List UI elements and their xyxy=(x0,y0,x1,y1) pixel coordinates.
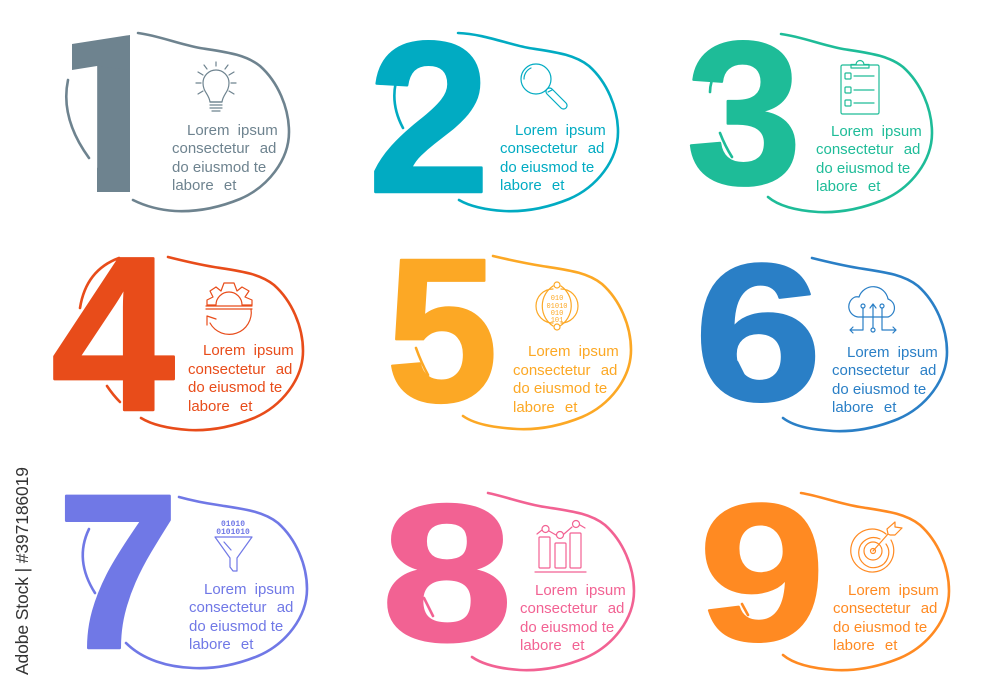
text block: Lorem ipsum xyxy=(528,343,619,360)
icon: light bulb xyxy=(196,62,236,111)
text block xyxy=(833,582,939,654)
text block: labore et xyxy=(189,636,254,653)
accent arc xyxy=(66,80,89,158)
text block: consectetur ad xyxy=(832,362,936,379)
text block: do eiusmod te xyxy=(172,159,266,176)
text block: consectetur ad xyxy=(188,361,292,378)
stock credit: Adobe Stock | #397186019 xyxy=(12,467,32,675)
accent arc xyxy=(416,348,428,375)
text block: do eiusmod te xyxy=(520,619,614,636)
text block: do eiusmod te xyxy=(833,619,927,636)
panel: step 2 xyxy=(368,0,618,239)
text block: labore et xyxy=(520,637,585,654)
accent stroke xyxy=(737,362,745,378)
text block xyxy=(832,344,938,416)
text block xyxy=(816,123,922,195)
outline curve xyxy=(768,34,932,212)
text block xyxy=(189,581,295,653)
number 1 xyxy=(72,35,130,192)
outline curve xyxy=(783,493,949,670)
text block xyxy=(500,122,606,194)
text block: consectetur ad xyxy=(833,600,937,617)
icon: binary funnel xyxy=(215,520,252,571)
icon: binary funnel: 01010 xyxy=(221,520,245,529)
text block: labore et xyxy=(513,399,578,416)
icon: clipboard xyxy=(841,60,879,114)
panel: step 8 xyxy=(381,464,634,683)
number 9: 9 xyxy=(698,463,826,682)
text block: Lorem ipsum xyxy=(848,582,939,599)
panel: step 5 xyxy=(386,216,631,445)
panel: step 3 xyxy=(686,0,932,227)
number 7: 7 xyxy=(57,448,179,695)
text block: labore et xyxy=(833,637,898,654)
icon: bar chart xyxy=(535,520,586,572)
text block: consectetur ad xyxy=(189,599,293,616)
text block: Lorem ipsum xyxy=(187,122,278,139)
number 6: 6 xyxy=(694,224,822,442)
text block xyxy=(520,582,626,654)
outline curve xyxy=(126,497,307,668)
panel: step 1 xyxy=(65,32,290,212)
outline curve xyxy=(133,33,289,211)
panel: step 6 xyxy=(694,224,947,442)
text block: do eiusmod te xyxy=(513,380,607,397)
outline curve xyxy=(783,258,947,431)
text block: labore et xyxy=(832,399,897,416)
text block: consectetur ad xyxy=(520,600,624,617)
icon: binary circle xyxy=(536,282,578,330)
number 2: 2 xyxy=(368,0,490,239)
accent arc xyxy=(394,72,403,128)
text block: Lorem ipsum xyxy=(831,123,922,140)
outline curve xyxy=(472,493,634,670)
outline curve xyxy=(458,33,618,211)
text block: do eiusmod te xyxy=(189,618,283,635)
number 4: 4 xyxy=(51,210,175,457)
text block: Lorem ipsum xyxy=(515,122,606,139)
text block: Lorem ipsum xyxy=(535,582,626,599)
number 8: 8 xyxy=(381,464,513,683)
text block xyxy=(188,342,294,415)
text block xyxy=(513,343,619,416)
text block: consectetur ad xyxy=(816,141,920,158)
panel: step 9 xyxy=(698,463,949,682)
text block xyxy=(172,122,278,194)
accent arc xyxy=(742,604,748,615)
panel: step 7 xyxy=(57,448,307,695)
text block: do eiusmod te xyxy=(188,379,282,396)
icon: binary funnel: 0101010 xyxy=(216,528,250,537)
text block: Lorem ipsum xyxy=(203,342,294,359)
accent arc xyxy=(424,598,433,616)
icon: binary circle: 01010 xyxy=(546,303,568,311)
text block: consectetur ad xyxy=(500,140,604,157)
text block: labore et xyxy=(188,398,253,415)
number 3: 3 xyxy=(686,0,802,227)
icon: target with arrow xyxy=(851,522,902,572)
accent arcs xyxy=(80,258,120,402)
icon: binary circle: 010 xyxy=(551,310,563,318)
text block: Lorem ipsum xyxy=(204,581,295,598)
text block: do eiusmod te xyxy=(816,160,910,177)
text block: labore et xyxy=(816,178,881,195)
text block: labore et xyxy=(500,177,565,194)
text block: consectetur ad xyxy=(513,362,617,379)
accent arc xyxy=(83,529,95,593)
accent arcs xyxy=(710,71,732,157)
outline curve xyxy=(463,256,631,429)
outline curve xyxy=(141,257,303,430)
icon: cloud network xyxy=(849,287,896,333)
text block: do eiusmod te xyxy=(500,159,594,176)
icon: magnifying glass xyxy=(521,64,567,109)
icon: binary circle: 101 xyxy=(551,317,563,325)
text block: labore et xyxy=(172,177,237,194)
icon: binary circle: 010 xyxy=(551,295,563,303)
panel: step 4 xyxy=(51,210,303,457)
text block: Lorem ipsum xyxy=(847,344,938,361)
number 5: 5 xyxy=(386,216,498,445)
text block: consectetur ad xyxy=(172,140,276,157)
text block: do eiusmod te xyxy=(832,381,926,398)
icon: gear with cycle arrow xyxy=(206,283,252,334)
